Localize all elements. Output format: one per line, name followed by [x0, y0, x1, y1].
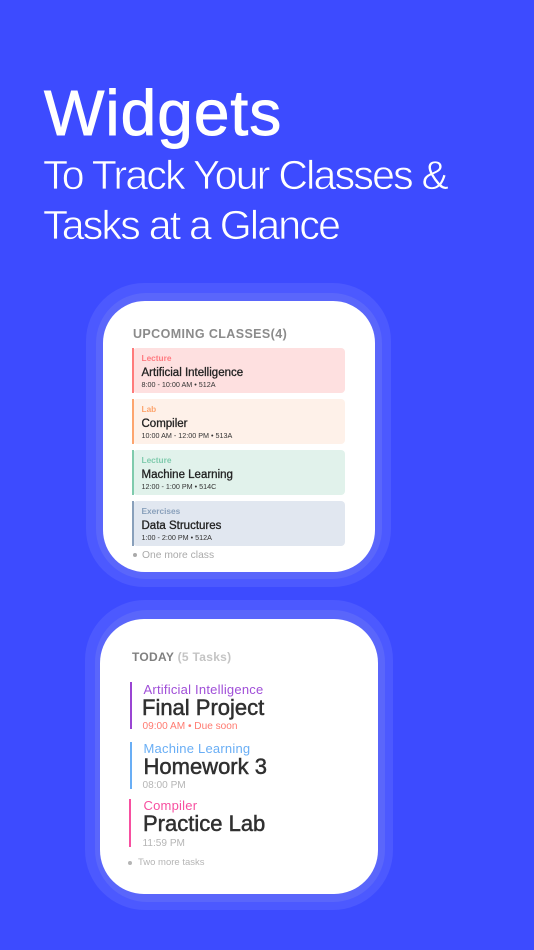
middle halo ring [96, 293, 382, 579]
task name: Homework 3 [144, 754, 267, 779]
note text: Two more tasks [138, 857, 205, 868]
class row: artificial intelligence: 8:00 - 10:00 AM • 512A [142, 380, 216, 388]
class row: compiler: Lab [142, 404, 156, 414]
middle halo ring [95, 610, 385, 902]
panel: upcoming classes widget [86, 283, 391, 587]
class row: artificial intelligence [133, 348, 345, 393]
subtitle: To Track Your Classes & [43, 152, 447, 198]
white card [103, 301, 375, 572]
white card [100, 619, 378, 894]
class row: data structures: Data Structures [142, 520, 221, 532]
title: Widgets [44, 77, 282, 149]
task name: Practice Lab [143, 811, 265, 836]
class row: artificial intelligence: Lecture [142, 353, 171, 363]
subtitle [43, 152, 448, 248]
task name: Final Project [142, 695, 264, 720]
class row: compiler: Compiler [142, 418, 188, 430]
task: homework 3 [130, 741, 267, 791]
panel: today tasks widget [85, 600, 393, 910]
due time: 08:00 PM [142, 780, 186, 791]
class row: data structures: 1:00 - 2:00 PM • 512A [142, 532, 212, 542]
due time: 11:59 PM [142, 838, 185, 849]
subtitle: Tasks at a Glance [43, 202, 339, 248]
heading: upcoming classes: UPCOMING CLASSES(4) [133, 327, 287, 341]
course name: Machine Learning [144, 741, 250, 756]
class row: compiler [133, 399, 345, 444]
note text: One more class [142, 550, 214, 561]
class row: compiler: 10:00 AM - 12:00 PM • 513A [142, 430, 232, 440]
class row: machine learning: Lecture [142, 455, 171, 465]
task: practice lab [129, 798, 265, 849]
bullet [133, 553, 137, 557]
task bar [130, 682, 132, 729]
due time: 09:00 AM • Due soon [142, 721, 238, 732]
class row: machine learning [133, 450, 345, 495]
class row: machine learning: Machine Learning [142, 469, 233, 481]
bullet [128, 861, 132, 865]
task: final project [130, 682, 264, 732]
heading: today: TODAY (5 Tasks) [132, 650, 231, 664]
task bar [130, 742, 132, 789]
course name: Compiler [144, 798, 197, 813]
class row: machine learning: 12:00 - 1:00 PM • 514C [142, 482, 216, 490]
task bar [129, 799, 131, 847]
class row: artificial intelligence: Artificial Intelligence [142, 367, 243, 379]
course name: Artificial Intelligence [144, 682, 263, 697]
class row: data structures [133, 501, 345, 546]
class row: data structures: Exercises [142, 506, 180, 516]
